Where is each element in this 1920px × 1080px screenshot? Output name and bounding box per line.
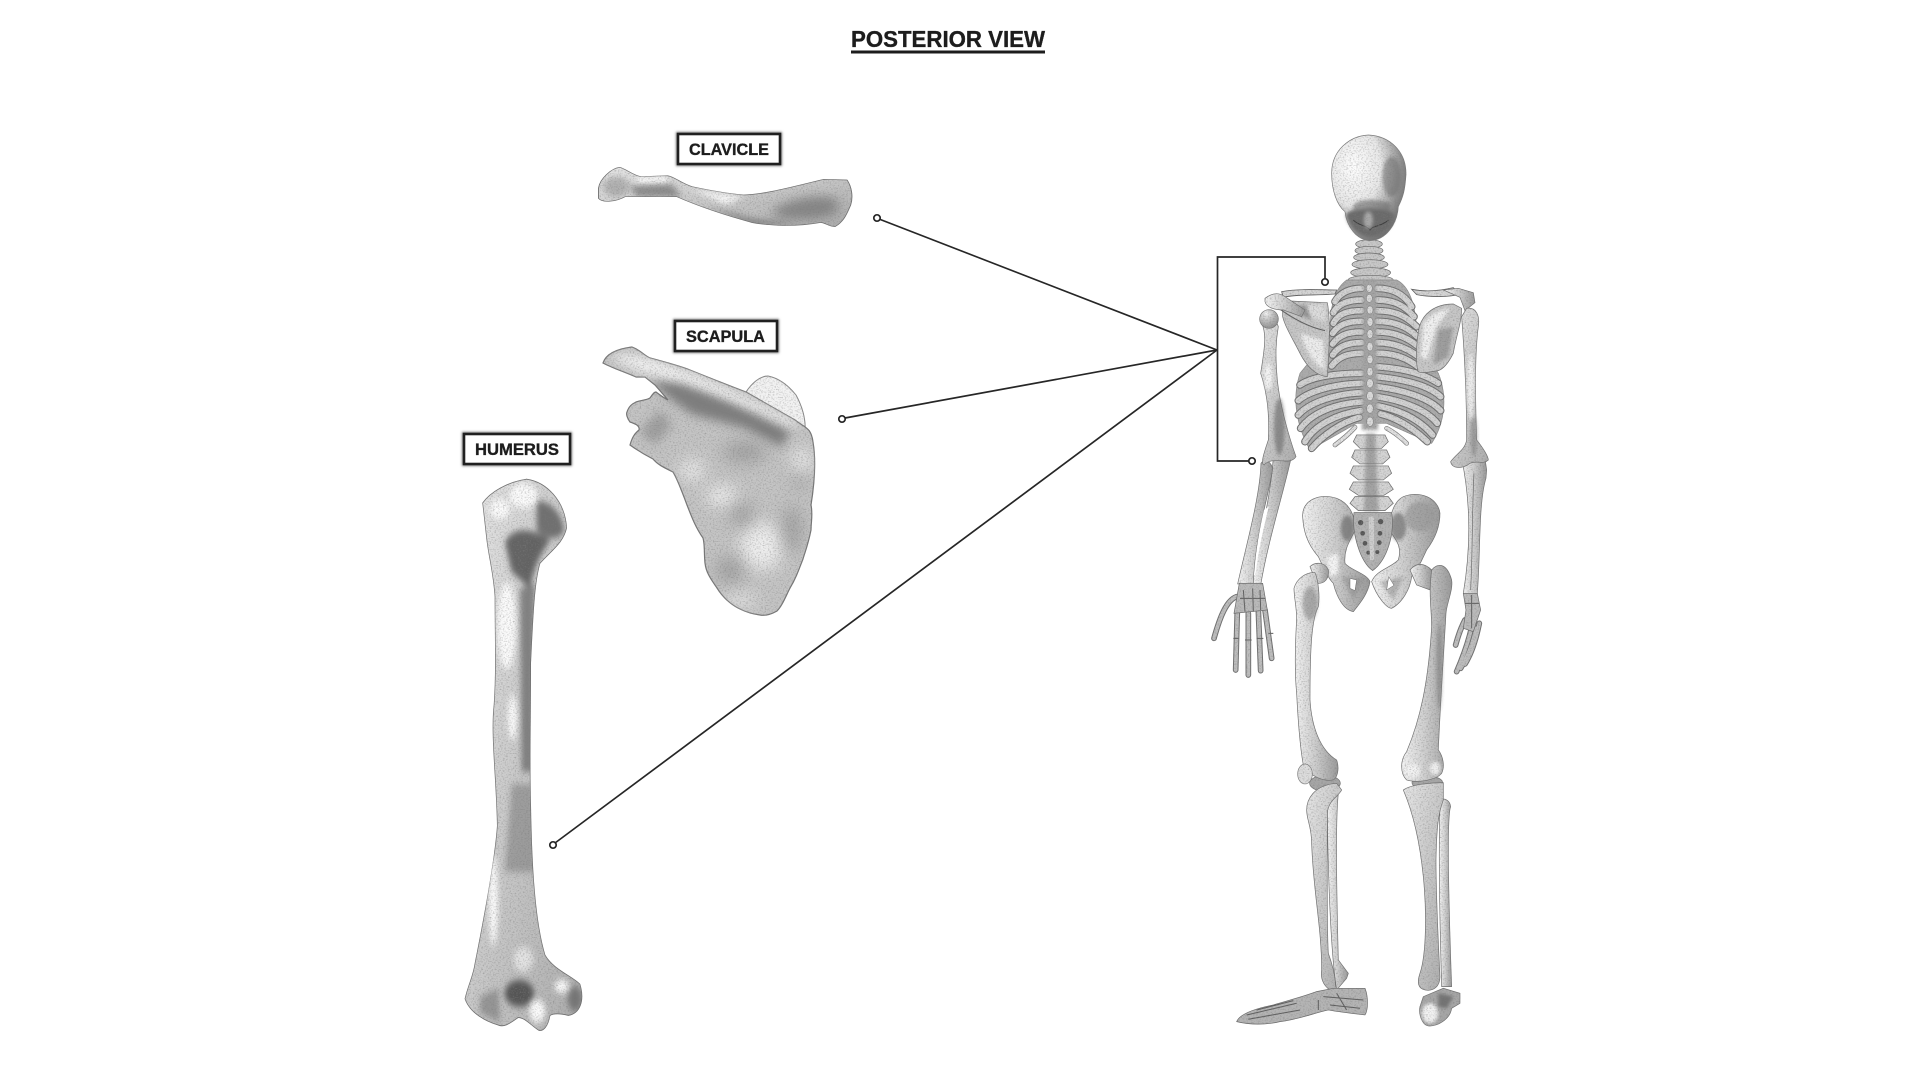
thoracic spine [1362,280,1378,430]
right foot [1420,988,1460,1026]
ribs left [1298,288,1362,448]
right tibia [1403,783,1443,990]
sacrum [1354,513,1392,571]
label: scapula [675,321,777,351]
right fibula [1439,799,1452,987]
floating ribs [1335,427,1407,445]
bracket: to skeleton shoulder and arm [1218,257,1325,461]
left fibula [1327,788,1348,990]
left forearm [1238,455,1291,585]
cervical spine [1348,240,1393,285]
left foot [1237,988,1367,1024]
left scapula [1277,301,1329,377]
shoulder acromion [1265,288,1475,317]
right humerus [1451,308,1488,468]
right scapula [1416,304,1462,373]
skeleton: full body posterior view [1214,135,1488,1026]
lumbar spine [1349,433,1393,512]
bone: scapula illustration [603,347,815,615]
skeleton bones with pencil texture [1214,135,1488,1026]
label: humerus: HUMERUS [475,441,559,459]
marker dots [550,215,1328,848]
left tibia [1307,783,1342,992]
label: scapula: SCAPULA [686,328,765,346]
humerus highlights [489,483,569,1023]
skeleton lower body [1214,563,1481,1026]
knee joints [1310,775,1443,791]
left humerus [1260,310,1296,465]
pelvis [1303,494,1440,612]
scapula superior lobe [746,376,805,432]
label: humerus [464,434,570,464]
scapula shading clipped to outline [610,354,811,605]
bone: humerus illustration [465,479,582,1030]
right femur [1402,564,1452,781]
pelvis openings and forearm gap [1254,507,1394,591]
label: clavicle [678,134,780,164]
title: POSTERIOR VIEW [851,26,1046,52]
ribs right [1377,288,1441,442]
label: clavicle: CLAVICLE [689,141,769,159]
skull [1332,135,1406,241]
clavicles [1282,288,1460,297]
bone: clavicle illustration [598,167,852,227]
humerus dark shading [480,501,582,1022]
right forearm [1462,458,1487,593]
right hand [1456,593,1481,672]
scapula body [603,347,815,615]
connector lines: bones to hub [555,219,1217,843]
rib cage base [1296,280,1444,450]
skeleton upper body [1238,135,1488,612]
left hand [1214,583,1273,675]
left femur [1294,563,1338,784]
